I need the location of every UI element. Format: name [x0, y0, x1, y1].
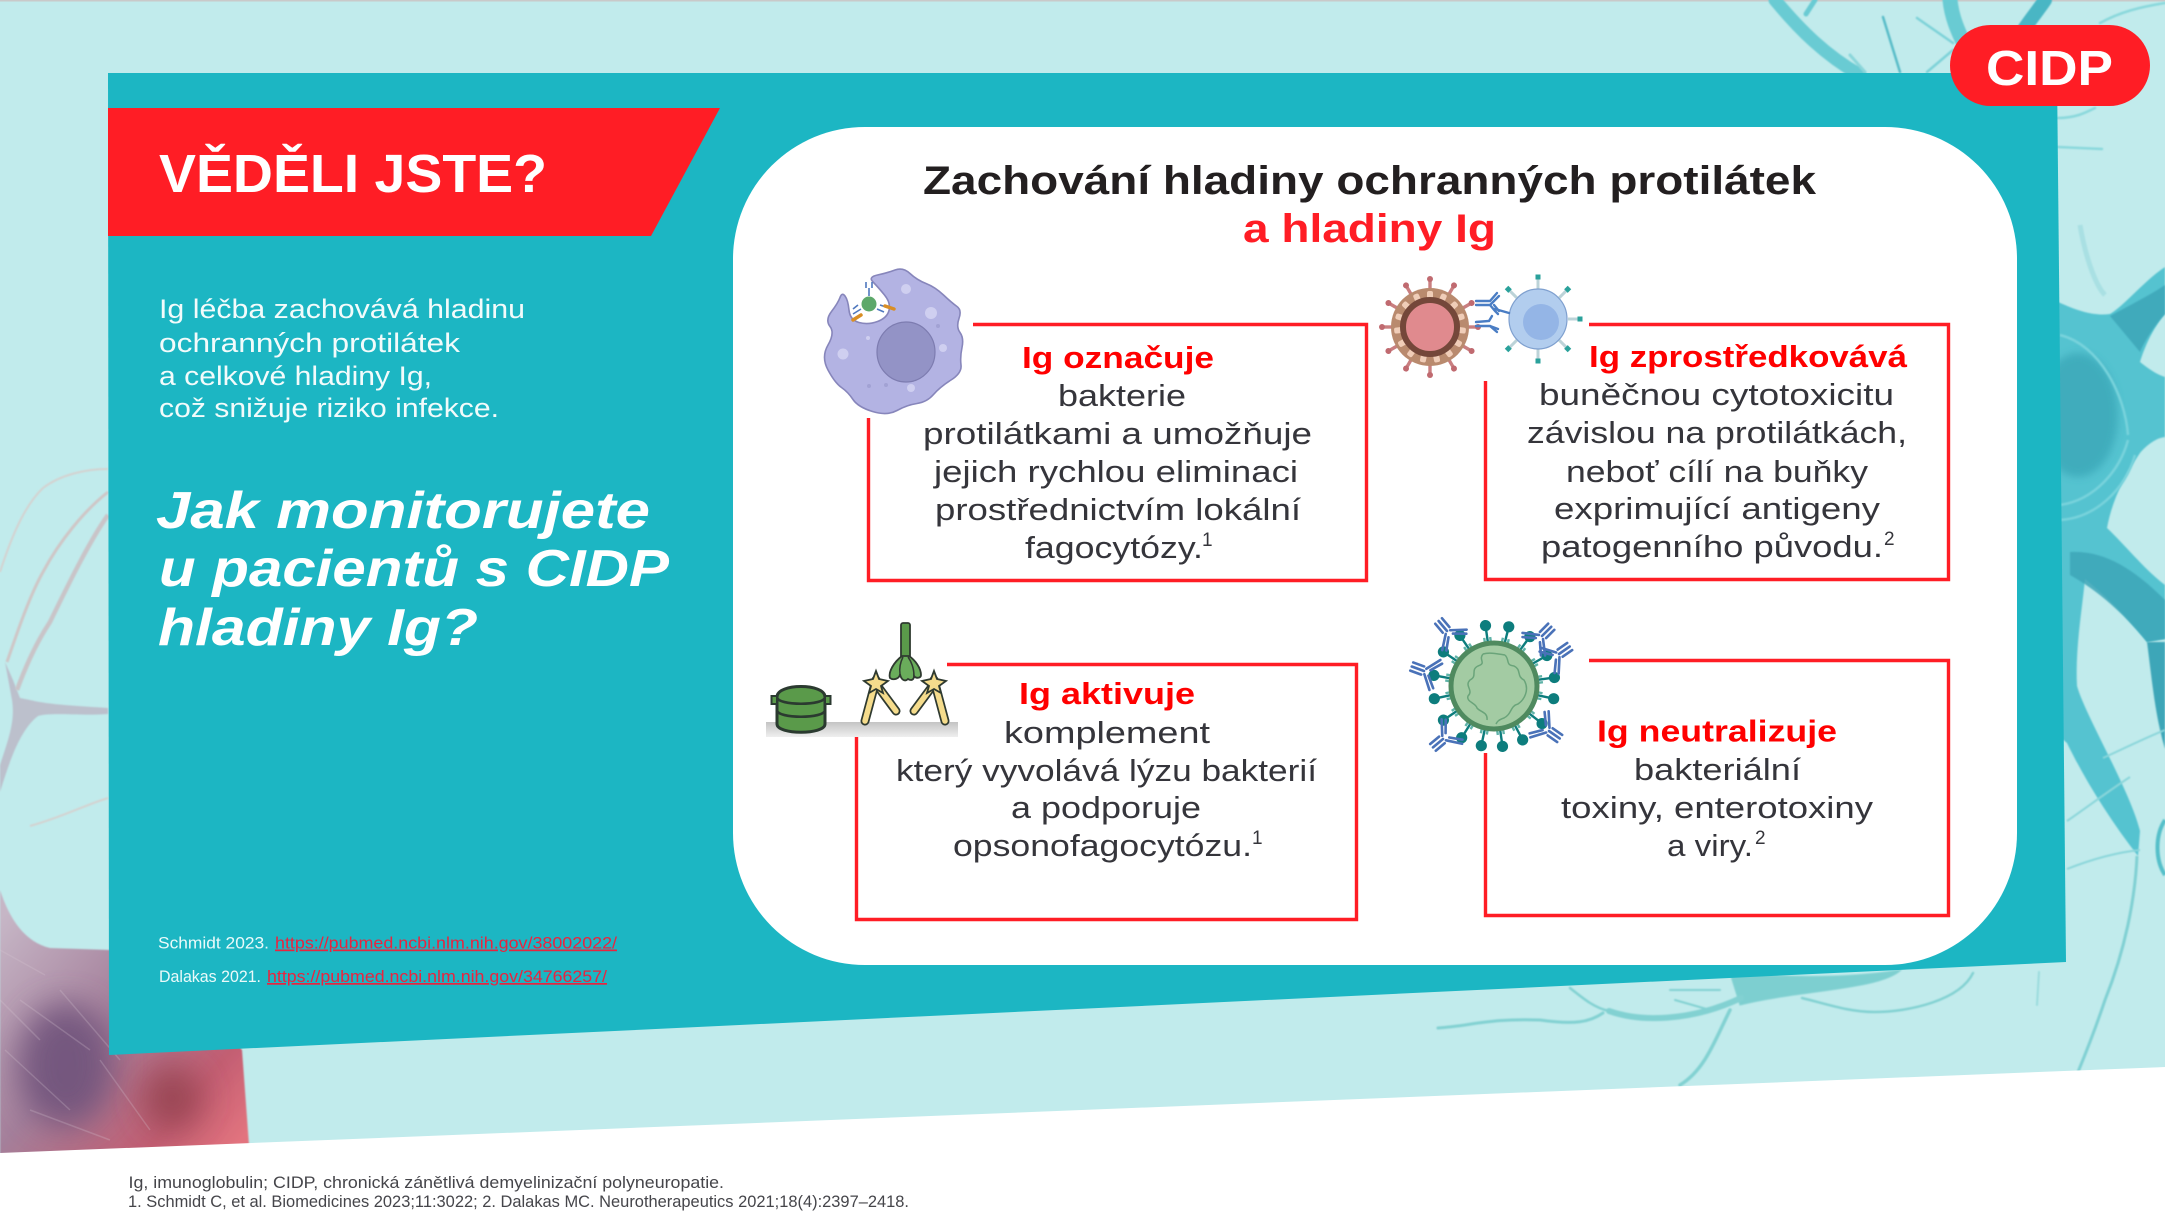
heading: Ig označuje [1022, 340, 1214, 375]
banner title: VĚDĚLI JSTE? [159, 143, 547, 204]
body text: 1 [1252, 828, 1263, 849]
panel: Ig neutralizuje [1406, 611, 1948, 916]
body text: 1 [1202, 530, 1213, 551]
left intro text: a celkové hladiny Ig, [159, 361, 432, 391]
body text: opsonofagocytózu. [953, 828, 1252, 863]
left intro text: Ig léčba zachovává hladinu [159, 294, 525, 324]
question: u pacientů s CIDP [159, 540, 669, 598]
body text: a podporuje [1011, 790, 1201, 825]
body text: komplement [1004, 715, 1210, 750]
body text: závislou na protilátkách, [1527, 415, 1907, 450]
references with links [158, 934, 617, 986]
card heading: a hladiny Ig [1243, 207, 1496, 251]
CIDP badge [1950, 25, 2150, 106]
body text: bakterie [1058, 378, 1186, 413]
left intro text [159, 294, 525, 423]
icon: infected cell and NK cell [1379, 274, 1582, 378]
CIDP badge: CIDP [1986, 42, 2113, 96]
heading: Ig aktivuje [1019, 676, 1195, 711]
references with links: Dalakas 2021. [159, 967, 261, 986]
teal panel [108, 73, 2066, 1055]
icon: complement [766, 623, 958, 737]
neuron: left pink cell [0, 469, 249, 1165]
body text: exprimující antigeny [1554, 491, 1881, 526]
body text: 2 [1884, 529, 1895, 550]
footer white band [0, 1067, 2165, 1220]
neuron: right teal cell [2038, 225, 2165, 1072]
card heading [923, 159, 1817, 251]
body text: který vyvolává lýzu bakterií [896, 753, 1317, 788]
references with links: https://pubmed.ncbi.nlm.nih.gov/38002022/ [275, 934, 617, 952]
body text: jejich rychlou eliminaci [933, 454, 1298, 489]
body text: protilátkami a umožňuje [923, 416, 1312, 451]
left intro text: ochranných protilátek [159, 328, 461, 358]
heading: Ig zprostředkovává [1589, 339, 1908, 374]
panel: Ig zprostředkovává [1379, 274, 1948, 580]
card heading: Zachování hladiny ochranných protilátek [923, 159, 1817, 203]
body text: fagocytózy. [1025, 530, 1203, 565]
body text: patogenního původu. [1541, 529, 1883, 564]
footnotes [128, 1174, 909, 1211]
icon: macrophage [824, 269, 963, 414]
body text: 2 [1755, 828, 1766, 849]
left intro text: což snižuje riziko infekce. [159, 393, 499, 423]
white content card [733, 127, 2017, 965]
top edge [0, 0, 2165, 2]
body text [1527, 377, 1907, 564]
neuron: top right branches [1775, 0, 2165, 149]
body text [896, 715, 1317, 863]
red banner [108, 108, 720, 236]
footnotes: Ig, imunoglobulin; CIDP, chronická zánětlivá demyelinizační polyneuropatie. [128, 1174, 724, 1192]
question: Jak monitorujete [156, 482, 650, 540]
body text: prostřednictvím lokální [935, 492, 1301, 527]
body text [1561, 752, 1874, 863]
references with links: Schmidt 2023. [158, 934, 269, 952]
footnotes: 1. Schmidt C, et al. Biomedicines 2023;11:3022; 2. Dalakas MC. Neurotherapeutics 2021;18(4):2397–2418. [128, 1193, 909, 1211]
body text: buněčnou cytotoxicitu [1539, 377, 1894, 412]
body text: neboť cílí na buňky [1566, 454, 1869, 489]
body text: toxiny, enterotoxiny [1561, 790, 1874, 825]
icon: neutralized virus [1406, 611, 1579, 760]
heading: Ig neutralizuje [1597, 714, 1837, 748]
neuron: bottom branches [1438, 970, 2039, 1085]
body text: a viry. [1667, 828, 1753, 863]
references with links: https://pubmed.ncbi.nlm.nih.gov/34766257/ [267, 967, 607, 986]
body text [923, 378, 1312, 565]
panel: Ig označuje [824, 269, 1366, 580]
question: hladiny Ig? [158, 599, 478, 657]
body text: bakteriální [1634, 752, 1801, 787]
panel: Ig aktivuje [766, 623, 1356, 920]
question [156, 482, 669, 657]
